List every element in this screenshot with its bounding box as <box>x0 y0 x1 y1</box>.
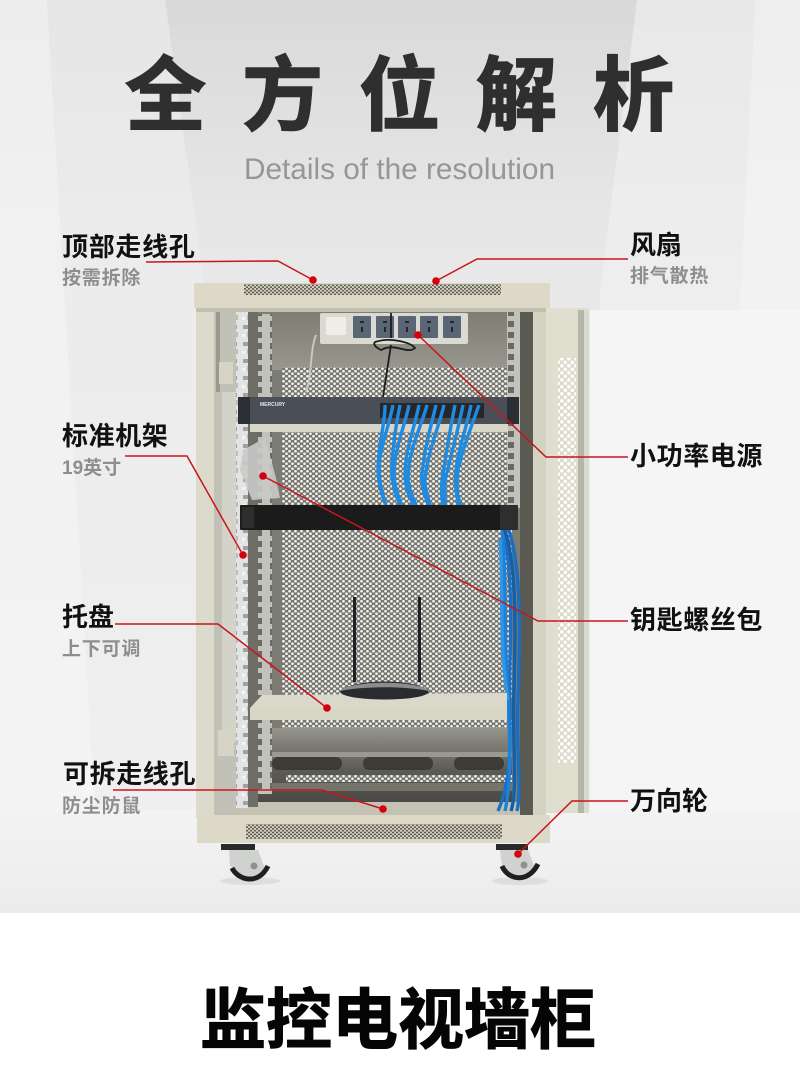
blue network cables <box>378 405 479 506</box>
callout: top cable hole: 顶部走线孔 <box>62 232 196 262</box>
callout: tray <box>62 602 331 712</box>
callout: removable cable hole: 防尘防鼠 <box>62 794 141 817</box>
bottom base <box>197 815 550 843</box>
callout: casters <box>514 786 708 858</box>
callout: top cable hole <box>62 232 317 289</box>
screw bag <box>240 438 280 500</box>
cable management panel <box>240 505 518 530</box>
callout: fan: 风扇 <box>630 230 682 260</box>
network switch: MERCURY <box>260 402 286 408</box>
subtitle: Details of the resolution <box>244 153 555 186</box>
bottom title: 监控电视墙柜 <box>200 983 596 1057</box>
callout: standard rack <box>62 421 247 559</box>
right post <box>533 308 546 818</box>
side door panel <box>546 308 589 813</box>
callout: fan: 排气散热 <box>630 265 709 287</box>
right square-hole rail <box>507 312 520 508</box>
callout: key and screw pack <box>259 472 763 635</box>
left square-hole rail <box>258 314 272 794</box>
callout: removable cable hole: 可拆走线孔 <box>63 759 196 789</box>
cabinet interior back wall <box>214 310 534 816</box>
left galvanized rail <box>236 312 248 808</box>
callout: small power supply: 小功率电源 <box>630 441 763 471</box>
callout: fan <box>432 230 709 287</box>
callout: key and screw pack: 钥匙螺丝包 <box>630 605 763 635</box>
network switch <box>238 397 519 424</box>
cable bundle on right <box>498 525 519 811</box>
right inner upright <box>520 312 533 816</box>
callout: removable cable hole <box>62 759 387 817</box>
left inner side panel <box>214 312 258 816</box>
callout: standard rack: 19英寸 <box>62 457 121 479</box>
power strip <box>306 313 468 392</box>
callout: tray: 托盘 <box>62 602 114 632</box>
callout: top cable hole: 按需拆除 <box>62 266 141 289</box>
callout: standard rack: 标准机架 <box>62 421 168 451</box>
black power cord <box>374 313 415 397</box>
door frame left <box>196 308 214 818</box>
top cover <box>194 283 550 312</box>
callout: small power supply <box>414 331 763 471</box>
callout: casters: 万向轮 <box>630 786 708 816</box>
shelf <box>250 693 507 720</box>
tray under switch <box>250 423 508 432</box>
left caster <box>220 844 280 885</box>
callout: tray: 上下可调 <box>62 638 141 660</box>
router <box>340 597 429 700</box>
right caster <box>492 844 548 885</box>
title: 全方位解析 <box>125 52 710 142</box>
cabinet <box>194 283 589 885</box>
